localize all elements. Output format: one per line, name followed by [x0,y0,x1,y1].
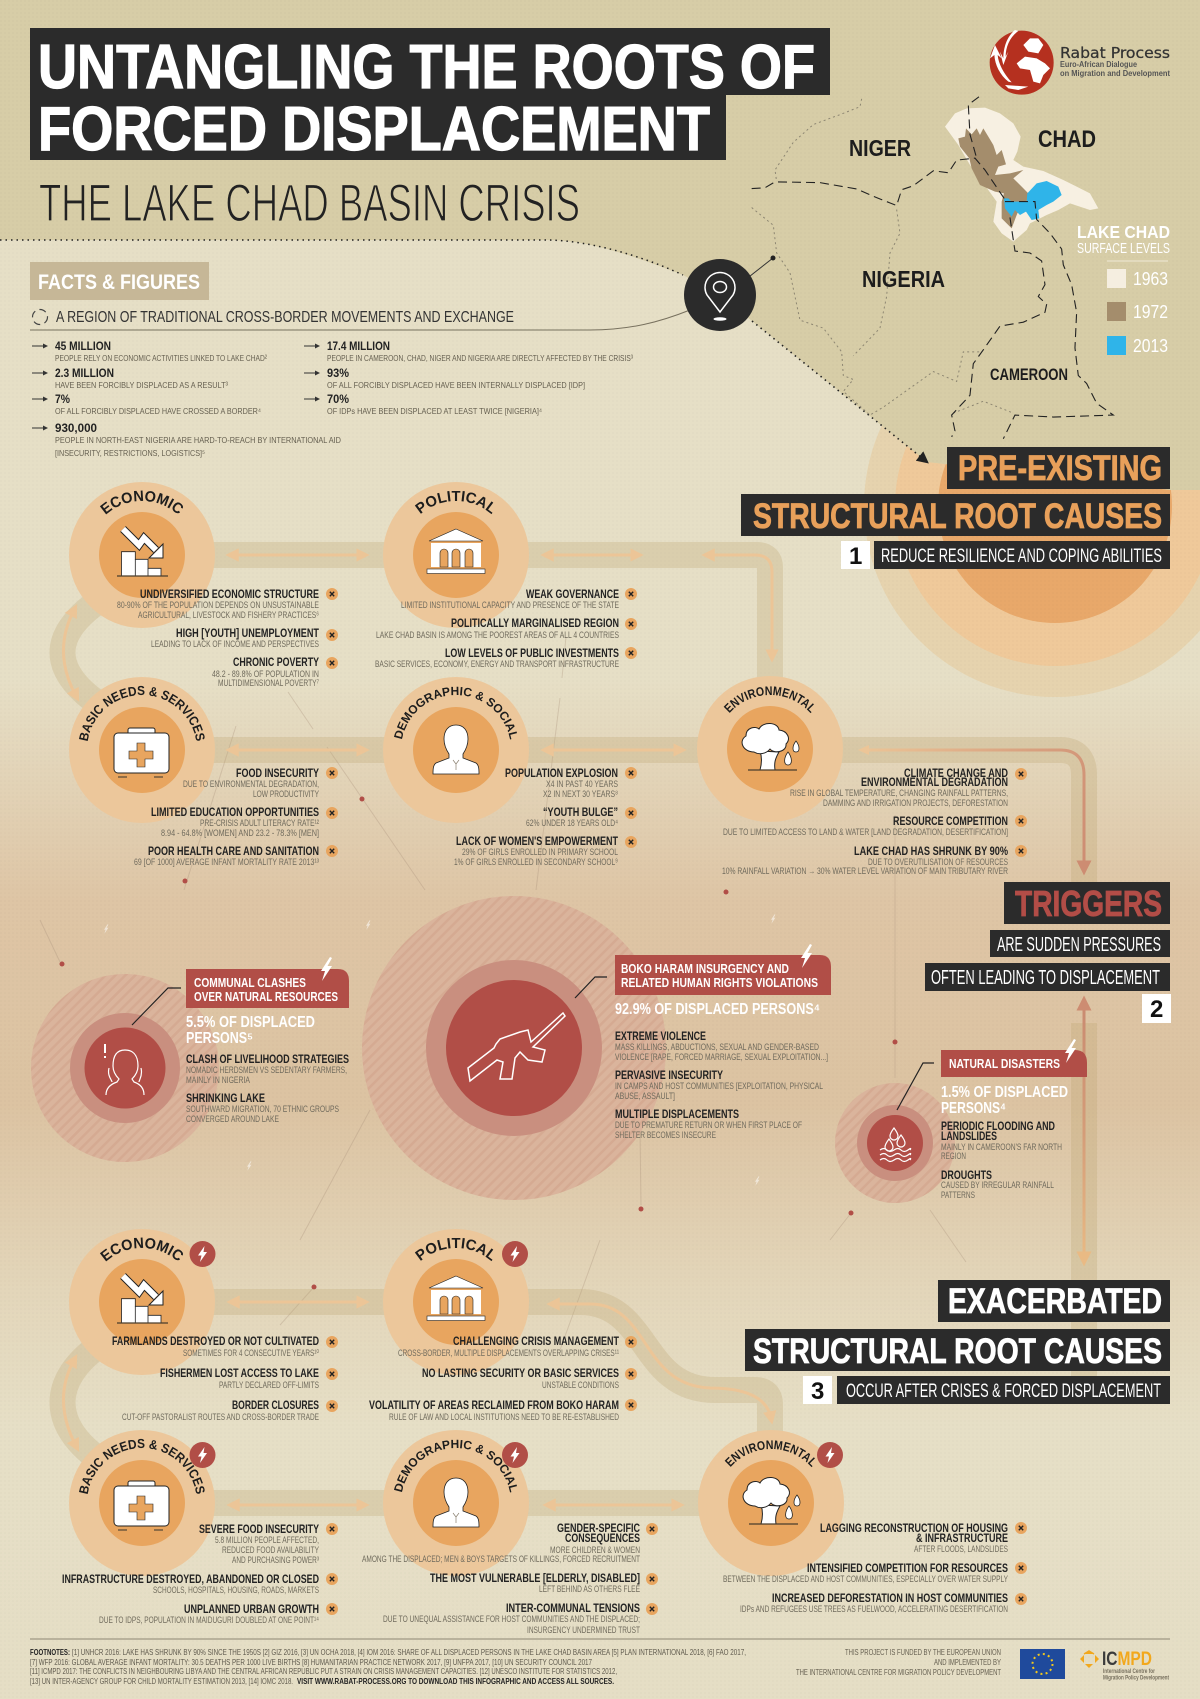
text: exacerbated economic: SOMETIMES FOR 4 CONSECUTIVE YEARS¹⁰ [183,1348,319,1359]
text: exacerbated basic needs: 5.8 MILLION PEOPLE AFFECTED, [215,1535,319,1546]
text: exacerbated economic: CUT-OFF PASTORALIST ROUTES AND CROSS-BORDER TRADE [122,1412,319,1423]
facts list: 45 MILLION [55,341,111,353]
map: CAMEROON [990,365,1068,384]
panel: boko haram: 92.9% OF DISPLACED PERSONS⁴ [615,1001,820,1018]
map: NIGER [849,135,911,161]
text: environmental causes: ENVIRONMENTAL DEGRADATION [861,777,1008,789]
panel: exacerbated environmental [698,1430,844,1576]
text: exacerbated environmental: INCREASED DEFORESTATION IN HOST COMMUNITIES [772,1593,1008,1605]
text: exacerbated basic needs: INFRASTRUCTURE DESTROYED, ABANDONED OR CLOSED [62,1574,319,1586]
panel: pre-existing environmental: ENVIRONMENTAL [724,686,814,714]
text: exacerbated environmental: IDPs AND REFUGEES USE TREES AS FUELWOOD, ACCELERATING DESERTIFICATION [740,1604,1008,1615]
heading: triggers: TRIGGERS [1015,883,1162,924]
facts list: [INSECURITY, RESTRICTIONS, LOGISTICS]⁵ [55,448,205,458]
text: demographic causes: 62% UNDER 18 YEARS OLD⁴ [526,818,618,829]
text: exacerbated environmental: AFTER FLOODS, LANDSLIDES [914,1544,1008,1555]
text: basic needs causes: DUE TO ENVIRONMENTAL DEGRADATION, [183,779,319,790]
funding statement: AND IMPLEMENTED BY [934,1657,1001,1667]
text: exacerbated economic [112,1336,338,1423]
connector tracks and arrows: exacerbated [62,1302,771,1505]
text: exacerbated economic: PARTLY DECLARED OFF-LIMITS [219,1380,319,1391]
panel: exacerbated demographic [383,1430,529,1576]
text: demographic causes: X4 IN PAST 40 YEARS [546,779,618,790]
panel: exacerbated economic: ECONOMIC [100,1238,183,1262]
footer rule [30,1638,1170,1640]
facts list: PEOPLE IN NORTH-EAST NIGERIA ARE HARD-TO-REACH BY INTERNATIONAL AID [55,435,341,445]
text: exacerbated environmental: & INFRASTRUCTURE [916,1533,1008,1545]
map legend: 1963 [1133,269,1168,289]
text: exacerbated demographic: INSURGENCY UNDERMINED TRUST [527,1625,640,1636]
footnotes [30,1648,746,1686]
text: economic causes: 48.2 - 89.8% OF POPULATION IN [212,669,319,680]
text: exacerbated political: VOLATILITY OF AREAS RECLAIMED FROM BOKO HARAM [369,1400,619,1412]
panel: natural disasters [835,1039,1087,1203]
text: political causes [375,588,637,670]
panel: boko haram: SHELTER BECOMES INSECURE [615,1130,716,1141]
heading: exacerbated structural root causes: 3 [811,1378,824,1405]
panel: boko haram: PERVASIVE INSECURITY [615,1070,723,1082]
text: exacerbated environmental: INTENSIFIED COMPETITION FOR RESOURCES [807,1563,1008,1575]
text: exacerbated demographic: CONSEQUENCES [565,1533,640,1545]
facts list: OF ALL FORCIBLY DISPLACED HAVE BEEN INTERNALLY DISPLACED [IDP] [327,380,585,390]
text: exacerbated basic needs: SCHOOLS, HOSPITALS, HOUSING, ROADS, MARKETS [153,1585,319,1596]
map [752,97,1113,439]
text: economic causes: LEADING TO LACK OF INCOME AND PERSPECTIVES [151,639,319,650]
heading: exacerbated structural root causes [745,1280,1170,1405]
circle: water icon [835,1083,955,1203]
tag: natural disasters: NATURAL DISASTERS [949,1057,1060,1071]
panel: pre-existing environmental [697,676,843,822]
circle: rifle icon [362,896,666,1200]
footnotes: [13] UN INTER-AGENCY GROUP FOR CHILD MORTALITY ESTIMATION 2013, [14] IOMC 2018. [30,1677,293,1686]
facts list: PEOPLE IN CAMEROON, CHAD, NIGER AND NIGERIA ARE DIRECTLY AFFECTED BY THE CRISIS³ [327,353,633,363]
panel: boko haram: VIOLENCE [RAPE, FORCED MARRIAGE, SEXUAL EXPLOITATION...] [615,1052,828,1063]
text: exacerbated environmental [723,1522,1027,1615]
text: exacerbated political: UNSTABLE CONDITIONS [542,1380,619,1391]
text: political causes: LOW LEVELS OF PUBLIC INVESTMENTS [445,648,619,660]
text: economic causes [117,588,338,689]
text: environmental causes: RISE IN GLOBAL TEMPERATURE, CHANGING RAINFALL PATTERNS, [790,788,1008,799]
title: FORCED DISPLACEMENT [38,95,710,164]
panel: natural disasters: DROUGHTS [941,1170,992,1182]
text: exacerbated political: RULE OF LAW AND LOCAL INSTITUTIONS NEED TO BE RE-ESTABLISHED [389,1412,619,1423]
panel: exacerbated economic [69,1229,216,1375]
footnotes: FOOTNOTES: [30,1648,70,1657]
ICMPD logo: ICMPD [1102,1649,1152,1670]
panel: exacerbated basic needs [69,1430,216,1576]
heading: pre-existing structural root causes: 1 [849,543,862,570]
facts list: PEOPLE RELY ON ECONOMIC ACTIVITIES LINKED TO LAKE CHAD² [55,353,267,363]
facts list: 70% [327,394,349,406]
text: exacerbated basic needs: REDUCED FOOD AVAILABILITY [222,1545,319,1556]
text: environmental causes: 10% RAINFALL VARIATION → 30% WATER LEVEL VARIATION OF MAIN TRIBUTARY RIVER [722,866,1008,877]
facts list: 2.3 MILLION [55,368,114,380]
facts list: 7% [55,394,70,406]
panel: communal clashes: 5.5% OF DISPLACED [186,1014,315,1031]
text: economic causes: MULTIDIMENSIONAL POVERTY⁷ [218,678,319,689]
text: environmental causes: RESOURCE COMPETITION [893,816,1008,828]
facts list: OF IDPs HAVE BEEN DISPLACED AT LEAST TWICE [NIGERIA]⁴ [327,406,542,416]
facts list: 930,000 [55,423,97,435]
facts and figures heading [30,262,209,300]
panel: communal clashes: NOMADIC HERDSMEN VS SEDENTARY FARMERS, [186,1065,347,1076]
text: environmental causes: CLIMATE CHANGE AND [904,768,1008,780]
panel: natural disasters: 1.5% OF DISPLACED [941,1084,1068,1101]
text: exacerbated demographic: INTER-COMMUNAL TENSIONS [506,1603,640,1615]
panel: boko haram: ABUSE, ASSAULT] [615,1091,675,1102]
EU flag [1020,1649,1065,1679]
tag: boko haram: BOKO HARAM INSURGENCY AND [621,962,789,976]
tag: boko haram: RELATED HUMAN RIGHTS VIOLATIONS [621,976,818,990]
footnotes: VISIT WWW.RABAT-PROCESS.ORG TO DOWNLOAD THIS INFOGRAPHIC AND ACCESS ALL SOURCES. [297,1677,614,1686]
heading: pre-existing structural root causes: PRE-EXISTING [958,449,1162,488]
text: basic needs causes [134,767,338,868]
ICMPD logo [1080,1649,1170,1682]
text: exacerbated economic: BORDER CLOSURES [232,1400,319,1412]
logo: Rabat Process: Euro-African Dialogue [1060,60,1138,69]
panel: boko haram: IN CAMPS AND HOST COMMUNITIES [EXPLOITATION, PHYSICAL [615,1081,823,1092]
text: exacerbated demographic [362,1523,658,1636]
panel: pre-existing economic [69,482,215,628]
map legend: 2013 [1133,336,1168,356]
tag: natural disasters [941,1039,1087,1077]
text: exacerbated economic: FISHERMEN LOST ACCESS TO LAKE [160,1368,319,1380]
text: exacerbated basic needs [62,1523,338,1626]
text: basic needs causes: LOW PRODUCTIVITY [253,789,319,800]
text: exacerbated demographic: GENDER-SPECIFIC [557,1523,640,1535]
footnotes: [7] WFP 2016: GLOBAL AVERAGE INFANT MORTALITY: 30.5 DEATHS PER 1000 LIVE BIRTHS [8] HUMANITARIAN PRACTICE NETWORK 2017, [9] UNFPA 2017, [10] UN SECURITY COUNCIL 2017 [30,1658,592,1667]
text: political causes: LAKE CHAD BASIN IS AMONG THE POOREST AREAS OF ALL 4 COUNTRIES [376,630,619,641]
text: basic needs causes: FOOD INSECURITY [236,768,319,780]
dotted path to pin [0,240,683,275]
text: economic causes: AGRICULTURAL, LIVESTOCK AND FISHERY PRACTICES⁶ [138,610,319,621]
text: basic needs causes: POOR HEALTH CARE AND SANITATION [148,846,319,858]
logo: Rabat Process: Rabat Process [1060,44,1170,62]
text: exacerbated basic needs: UNPLANNED URBAN GROWTH [184,1604,319,1616]
text: demographic causes: X2 IN NEXT 30 YEARS⁸ [543,789,618,800]
text: environmental causes: DAMMING AND IRRIGATION PROJECTS, DEFORESTATION [823,798,1008,809]
panel: pre-existing demographic [383,677,529,823]
panel: natural disasters: PATTERNS [941,1190,975,1201]
panel: natural disasters: MAINLY IN CAMEROON'S FAR NORTH [941,1142,1062,1153]
text: exacerbated political: CROSS-BORDER, MULTIPLE DISPLACEMENTS OVERLAPPING CRISES¹¹ [398,1348,619,1359]
text: basic needs causes: 8.94 - 64.8% [WOMEN] AND 23.2 - 78.3% [MEN] [161,828,319,839]
text: exacerbated demographic: AMONG THE DISPLACED; MEN & BOYS TARGETS OF KILLINGS, FORCED RECRUITMENT [362,1554,640,1565]
subtitle: THE LAKE CHAD BASIN CRISIS [39,174,580,233]
tag: communal clashes: COMMUNAL CLASHES [194,976,306,990]
panel: exacerbated political: POLITICAL [414,1238,494,1262]
circle: communal clashes with person icon [31,974,219,1162]
map: CHAD [1038,126,1096,153]
text: political causes: POLITICALLY MARGINALISED REGION [451,618,619,630]
panel: pre-existing political: POLITICAL [414,491,494,514]
heading: pre-existing structural root causes [741,447,1170,570]
footnotes: [11] ICMPD 2017: THE CONFLICTS IN NEIGHBOURING LIBYA AND THE CENTRAL AFRICAN REPUBLIC PUT A STRAIN ON CRISIS MANAGEMENT CAPACITIES. [12] UNESCO INSTITUTE FOR STATISTICS 2012, [30,1667,617,1676]
heading: triggers [925,882,1171,1023]
text: exacerbated basic needs: DUE TO IDPS, POPULATION IN MAIDUGURI DOUBLED AT ONE POINT¹⁴ [99,1615,319,1626]
text: environmental causes: LAKE CHAD HAS SHRUNK BY 90% [854,846,1008,858]
panel: communal clashes [31,957,349,1162]
panel: natural disasters: PERSONS⁴ [941,1100,1006,1117]
panel: communal clashes: SHRINKING LAKE [186,1093,265,1105]
panel: boko haram: DUE TO PREMATURE RETURN OR WHEN FIRST PLACE OF [615,1120,802,1131]
text: basic needs causes: LIMITED EDUCATION OPPORTUNITIES [151,807,319,819]
ICMPD logo: International Centre for [1103,1668,1155,1675]
funding statement: THE INTERNATIONAL CENTRE FOR MIGRATION POLICY DEVELOPMENT [796,1667,1001,1677]
panel: boko haram: MASS KILLINGS, ABDUCTIONS, SEXUAL AND GENDER-BASED [615,1042,819,1053]
panel: pre-existing demographic: DEMOGRAPHIC & SOCIAL [394,686,517,740]
text: environmental causes: DUE TO OVERUTILISATION OF RESOURCES [868,857,1008,868]
panel: pre-existing political [383,482,529,628]
panel: communal clashes: PERSONS⁵ [186,1030,253,1047]
panel: natural disasters: REGION [941,1151,966,1162]
title: UNTANGLING THE ROOTS OF [38,33,815,102]
text: demographic causes: “YOUTH BULGE” [543,807,618,819]
map legend: 1972 [1133,302,1168,322]
ICMPD logo: Migration Policy Development [1103,1674,1170,1682]
panel: boko haram: MULTIPLE DISPLACEMENTS [615,1109,739,1121]
text: environmental causes: DUE TO LIMITED ACCESS TO LAND & WATER [LAND DEGRADATION, DESERTIFICATION] [723,827,1008,838]
panel: communal clashes: CLASH OF LIVELIHOOD STRATEGIES [186,1054,349,1066]
text: exacerbated political [369,1336,637,1423]
text: exacerbated demographic: DUE TO UNEQUAL ASSISTANCE FOR HOST COMMUNITIES AND THE DISPLACED; [383,1614,640,1625]
underline to pin [30,310,690,330]
facts list [32,341,633,458]
text: exacerbated political: CHALLENGING CRISIS MANAGEMENT [453,1336,619,1348]
panel: exacerbated environmental: ENVIRONMENTAL [724,1440,815,1468]
panel: exacerbated basic needs: BASIC NEEDS & SERVICES [79,1438,205,1494]
text: exacerbated demographic: LEFT BEHIND AS OTHERS FLEE [539,1584,640,1595]
text: environmental causes [722,768,1027,877]
text: economic causes: HIGH [YOUTH] UNEMPLOYMENT [176,628,319,640]
connector tracks and arrows: triggers to exacerbated [1071,1003,1097,1376]
facts list: HAVE BEEN FORCIBLY DISPLACED AS A RESULT³ [55,380,228,390]
logo: Rabat Process [990,30,1170,95]
text: exacerbated basic needs: SEVERE FOOD INSECURITY [199,1524,319,1536]
text: political causes: BASIC SERVICES, ECONOMY, ENERGY AND TRANSPORT INFRASTRUCTURE [375,659,619,670]
text: demographic causes: 1% OF GIRLS ENROLLED IN SECONDARY SCHOOL⁹ [454,857,618,868]
text: exacerbated environmental: LAGGING RECONSTRUCTION OF HOUSING [820,1523,1008,1535]
text: political causes: LIMITED INSTITUTIONAL CAPACITY AND PRESENCE OF THE STATE [401,600,619,611]
text: political causes: WEAK GOVERNANCE [526,589,619,601]
funding statement: THIS PROJECT IS FUNDED BY THE EUROPEAN UNION [845,1647,1001,1657]
map pin [684,256,776,331]
title [30,28,830,164]
tag: communal clashes [186,957,349,1008]
facts list: 93% [327,368,349,380]
text: demographic causes: LACK OF WOMEN'S EMPOWERMENT [456,836,618,848]
panel: communal clashes: MAINLY IN NIGERIA [186,1075,250,1086]
text: basic needs causes: 69 [OF 1000] AVERAGE INFANT MORTALITY RATE 2013¹³ [134,857,319,868]
tag: communal clashes: OVER NATURAL RESOURCES [194,990,338,1004]
text: exacerbated environmental: BETWEEN THE DISPLACED AND HOST COMMUNITIES, ESPECIALLY OVER WATER SUPPLY [723,1574,1008,1585]
text: economic causes: 80-90% OF THE POPULATION DEPENDS ON UNSUSTAINABLE [117,600,319,611]
funding statement [796,1647,1001,1677]
panel: exacerbated demographic: DEMOGRAPHIC & SOCIAL [394,1440,517,1492]
panel: communal clashes: SOUTHWARD MIGRATION, 70 ETHNIC GROUPS [186,1104,339,1115]
text: economic causes: CHRONIC POVERTY [233,657,319,669]
dotted arrow to pre-existing causes [752,321,927,462]
text: demographic causes: 29% OF GIRLS ENROLLED IN PRIMARY SCHOOL [462,847,618,858]
heading: triggers: 2 [1150,996,1163,1023]
text: exacerbated demographic: THE MOST VULNERABLE [ELDERLY, DISABLED] [430,1573,640,1585]
text: exacerbated demographic: MORE CHILDREN & WOMEN [550,1545,640,1556]
panel: boko haram: EXTREME VIOLENCE [615,1031,706,1043]
footnotes: [1] UNHCR 2016: LAKE HAS SHRUNK BY 90% SINCE THE 1950S [2] GIZ 2016, [3] UN OCHA 2018, [4] IOM 2016: SHARE OF ALL DISPLACED PERSONS IN THE LAKE CHAD BASIN AREA [5] PLAN INTERNATIONAL 2018, [6] FAO 2017, [72,1648,746,1657]
map legend: LAKE CHAD [1077,222,1170,242]
connector tracks and arrows: pre-existing [62,555,1084,882]
facts list: 17.4 MILLION [327,341,390,353]
text: exacerbated basic needs: AND PURCHASING POWER³ [232,1555,319,1566]
text: economic causes: UNDIVERSIFIED ECONOMIC STRUCTURE [140,589,319,601]
facts and figures heading: FACTS & FIGURES [38,271,200,294]
facts list: OF ALL FORCIBLY DISPLACED HAVE CROSSED A BORDER⁴ [55,406,261,416]
panel: natural disasters: CAUSED BY IRREGULAR RAINFALL [941,1180,1054,1191]
text: basic needs causes: PRE-CRISIS ADULT LITERACY RATE¹² [200,818,319,829]
text: exacerbated economic: FARMLANDS DESTROYED OR NOT CULTIVATED [112,1336,319,1348]
text: demographic causes: POPULATION EXPLOSION [505,768,618,780]
panel: pre-existing basic needs: BASIC NEEDS & SERVICES [79,686,205,741]
text: demographic causes [454,767,637,868]
panel: exacerbated political [383,1229,529,1375]
tag: boko haram [615,944,831,995]
text: exacerbated political: NO LASTING SECURITY OR BASIC SERVICES [422,1368,619,1380]
panel: natural disasters: PERIODIC FLOODING AND [941,1121,1055,1133]
logo: Rabat Process: on Migration and Development [1060,69,1170,78]
panel: pre-existing economic: ECONOMIC [100,490,183,514]
cross-border statement: A REGION OF TRADITIONAL CROSS-BORDER MOVEMENTS AND EXCHANGE [56,309,514,326]
map legend [1077,222,1170,356]
panel: boko haram [362,896,831,1200]
panel: natural disasters: LANDSLIDES [941,1131,997,1143]
map: NIGERIA [862,266,945,292]
panel: communal clashes: CONVERGED AROUND LAKE [186,1114,279,1125]
panel: pre-existing basic needs [69,677,215,823]
